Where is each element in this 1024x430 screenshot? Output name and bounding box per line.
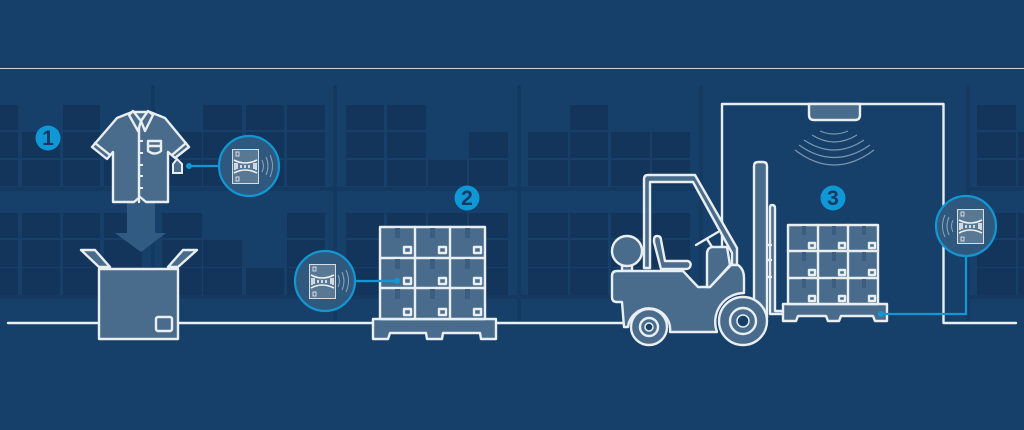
seat — [654, 236, 691, 269]
forklift carriage — [770, 205, 785, 314]
top divider line — [0, 68, 1024, 69]
RFID tag badge 3 — [936, 196, 996, 256]
box labels — [404, 247, 481, 315]
hood panel — [707, 247, 730, 287]
forklift — [612, 162, 785, 345]
box labels — [809, 243, 875, 301]
open cardboard box — [81, 250, 197, 339]
pallet stack 3 — [783, 225, 887, 321]
boxes — [788, 225, 878, 304]
pallet — [373, 319, 496, 339]
pallet stack 2 — [373, 227, 496, 339]
box tape marks — [395, 228, 470, 299]
rear wheel — [631, 309, 667, 345]
step 2 badge: 2 — [461, 187, 473, 210]
forklift body — [612, 265, 744, 332]
forklift cage — [644, 175, 737, 268]
connector: shirt tag to RFID icon — [186, 163, 220, 169]
box tape marks — [802, 226, 866, 288]
RFID tag badge 2 — [295, 251, 355, 311]
steering wheel — [696, 232, 718, 247]
front wheel — [719, 297, 767, 345]
step 3 badge — [820, 186, 846, 210]
ceiling RFID reader — [795, 104, 874, 165]
boxes — [380, 227, 485, 319]
floor line — [8, 322, 628, 324]
reader signal waves — [795, 131, 874, 165]
door frame — [722, 104, 1016, 323]
shirt buttons — [140, 140, 143, 189]
step 2 badge — [454, 186, 480, 210]
pallet — [783, 304, 887, 321]
arrow: shirt into box — [115, 200, 166, 252]
step 1 badge: 1 — [42, 127, 54, 150]
connector: pallet to RFID icon — [355, 278, 400, 284]
RFID tag badge 1 — [219, 136, 279, 196]
connector: pallet to RFID icon — [878, 256, 966, 317]
propane tank — [612, 236, 642, 271]
forklift mast — [754, 162, 767, 318]
icon: shirt with tag — [92, 111, 189, 202]
warehouse shelving backdrop — [0, 85, 1024, 321]
shirt tag — [173, 159, 182, 173]
step 1 badge — [36, 126, 60, 150]
step 3 badge: 3 — [827, 187, 839, 210]
shirt collar — [129, 111, 153, 131]
